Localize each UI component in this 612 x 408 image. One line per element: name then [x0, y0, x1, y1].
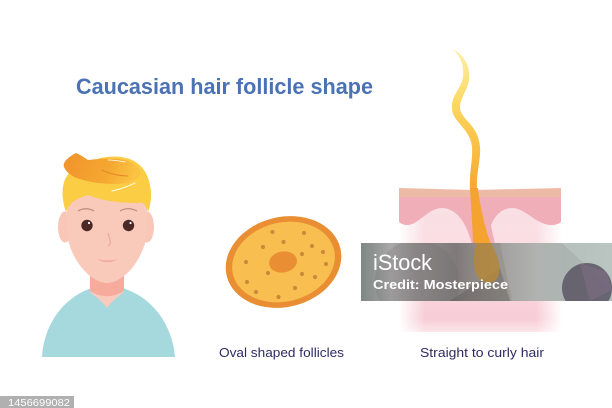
hair root: [470, 188, 495, 250]
follicle outer ring: [216, 204, 351, 320]
dermis right fade: [536, 200, 562, 332]
follicle inner: [223, 211, 344, 313]
follicle dots: [244, 230, 328, 299]
caption: hair: Straight to curly hair: [420, 346, 544, 360]
follicle cross-section: [216, 204, 351, 320]
epidermis: [399, 196, 561, 244]
credit: Credit: Mosterpiece: [373, 278, 508, 292]
dermis side fade: [399, 200, 425, 332]
band shapes: [375, 243, 612, 301]
eyes: [81, 220, 134, 231]
mouth: [97, 259, 118, 262]
watermark band: [361, 243, 612, 301]
shirt: [42, 288, 175, 357]
hair highlights: [102, 160, 135, 191]
eyebrows: [78, 209, 137, 211]
caption: follicles: Oval shaped follicles: [219, 346, 344, 360]
hair strand: [452, 49, 480, 190]
neck: [90, 270, 124, 308]
neck shadow: [90, 272, 124, 296]
hair bulb behind band: [474, 243, 500, 283]
illustration: blond man: [42, 153, 175, 357]
ears: [58, 212, 154, 242]
dermis: [399, 200, 561, 332]
tag background: [0, 396, 74, 408]
stratum corneum: [399, 188, 561, 197]
title: Caucasian hair follicle shape: [76, 74, 373, 99]
brand: iStock: [373, 250, 433, 275]
hair back: [63, 156, 151, 212]
nose: [108, 233, 110, 246]
hair quiff: [64, 153, 141, 184]
follicle core: [267, 249, 299, 275]
face: [67, 182, 147, 283]
image id tag: [0, 396, 74, 408]
skin section diagram: [399, 49, 562, 332]
band background: [361, 243, 612, 301]
